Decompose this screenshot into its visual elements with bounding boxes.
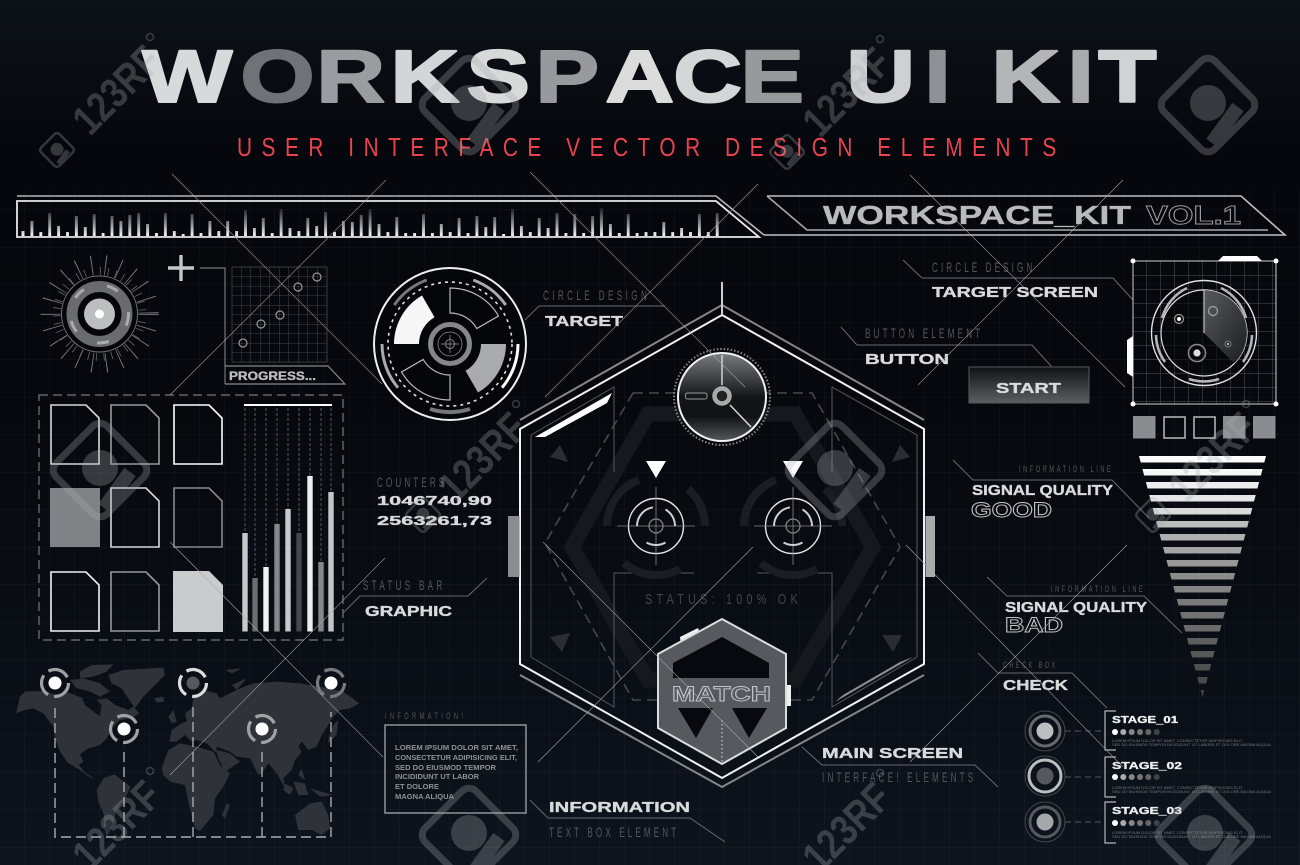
value: GOOD — [971, 499, 1052, 522]
squares row — [1133, 416, 1276, 438]
title: W — [142, 36, 233, 118]
caption: CIRCLE DESIGN — [543, 289, 647, 304]
title: T — [1098, 36, 1157, 118]
label: button — [841, 327, 1052, 368]
label: signal quality good — [953, 460, 1149, 522]
watermark registered marks — [146, 34, 1250, 776]
stage indicators — [1025, 711, 1104, 842]
stage 03: SED DO EIUSMOD TEMPOR INCIDIDUNT UT LABORE ET DOLORE MAGNA ALIQUA — [1112, 834, 1271, 839]
caption: INFORMATION LINE — [1019, 464, 1111, 474]
world map — [16, 664, 359, 837]
crosshair right — [744, 480, 842, 575]
subtitle: USER INTERFACE VECTOR DESIGN ELEMENTS — [237, 133, 1056, 162]
name: TARGET — [545, 313, 623, 330]
name: INFORMATION — [549, 799, 690, 816]
title: C — [673, 36, 742, 118]
map dashed leaders — [55, 707, 331, 837]
counters: COUNTERS — [377, 476, 444, 491]
bar chart — [242, 405, 334, 632]
title: A — [605, 36, 674, 118]
status text: STATUS: 100% OK — [645, 590, 798, 607]
title: R — [316, 36, 385, 118]
chart: signal funnel — [1139, 456, 1266, 696]
information lines — [395, 743, 518, 801]
caption: TEXT BOX ELEMENT — [549, 826, 676, 841]
panel: main hexagon screen — [508, 282, 935, 787]
watermark text: 123RF — [429, 404, 536, 510]
name: GRAPHIC — [365, 603, 452, 620]
value: BAD — [1005, 614, 1063, 637]
side tabs — [508, 516, 520, 577]
watermark text: 123RF — [1159, 404, 1266, 510]
information lines: LOREM IPSUM DOLOR SIT AMET, — [395, 743, 518, 752]
label: main screen — [802, 745, 998, 787]
dim hexagon band — [572, 414, 873, 680]
dashed hexagon — [545, 393, 900, 700]
panel: top equalizer bar — [17, 196, 764, 237]
title: O — [240, 36, 315, 118]
label: target — [525, 289, 665, 330]
name: TARGET SCREEN — [932, 284, 1098, 301]
panel: information text box — [385, 711, 526, 813]
panel: progress chart — [200, 267, 345, 384]
match badge: MATCH — [672, 683, 771, 706]
panel: information text box: INFORMATION! — [385, 711, 463, 721]
document tiles — [50, 405, 223, 632]
label: information — [530, 799, 725, 842]
button: start — [969, 367, 1089, 403]
caption: STATUS BAR — [363, 579, 442, 594]
name: MAIN SCREEN — [822, 745, 963, 762]
title: K — [390, 36, 459, 118]
information lines: ET DOLORE — [395, 782, 439, 791]
panel: document grid and bars — [39, 395, 343, 640]
stage 02: SED DO EIUSMOD TEMPOR INCIDIDUNT UT LABORE ET DOLORE MAGNA ALIQUA — [1112, 789, 1271, 794]
title: P — [535, 36, 599, 118]
icon: plus — [168, 255, 194, 281]
banner volume: VOL.1 — [1146, 200, 1241, 230]
name: SIGNAL QUALITY — [1005, 599, 1147, 616]
label: signal quality bad — [987, 577, 1182, 637]
stage 03 — [1112, 805, 1271, 839]
progress label: PROGRESS... — [229, 371, 316, 383]
information lines: SED DO EIUSMOD TEMPOR — [395, 763, 497, 772]
title: E — [740, 36, 831, 118]
title: K — [991, 36, 1060, 118]
caption: CIRCLE DESIGN — [932, 261, 1032, 276]
watermark small cameras — [39, 132, 1171, 865]
crosshair left — [607, 480, 705, 575]
stage 01: LOREM IPSUM DOLOR SIT AMET, CONSECTETUR ADIPISICING ELIT, — [1112, 738, 1243, 743]
panel: kit banner — [764, 196, 1285, 235]
banner name: WORKSPACE_KIT — [823, 200, 1131, 230]
name: CHECK — [1003, 677, 1068, 694]
information lines: INCIDIDUNT UT LABOR — [395, 772, 480, 781]
watermark text: 123RF — [63, 37, 170, 143]
title: I — [924, 36, 977, 118]
caption: INTERFACE! ELEMENTS — [822, 771, 973, 786]
dim triangles — [550, 445, 910, 652]
stage 01: SED DO EIUSMOD TEMPOR INCIDIDUNT UT LABORE ET DOLORE MAGNA ALIQUA — [1112, 742, 1271, 747]
information lines: MAGNA ALIQUA — [395, 792, 455, 801]
panel: stages — [1025, 711, 1271, 843]
counters — [377, 476, 492, 528]
title: S — [466, 36, 530, 118]
icon: sunburst dial — [50, 265, 148, 363]
stage brackets — [1105, 711, 1116, 843]
corner slashes — [535, 393, 612, 437]
counter values: 2563261,73 — [377, 513, 492, 528]
information lines: CONSECTETUR ADIPISICING ELIT, — [395, 753, 517, 762]
name: BUTTON — [865, 351, 949, 368]
label: graphic — [343, 578, 487, 620]
stage 02 — [1112, 760, 1271, 794]
title: U — [846, 36, 915, 118]
match badge — [658, 619, 791, 764]
label: target screen — [903, 260, 1133, 301]
hexagon frame — [520, 282, 924, 787]
title: I — [1067, 36, 1094, 118]
stage 02: STAGE_02 — [1112, 760, 1182, 772]
caption: CHECK BOX — [1003, 660, 1056, 670]
caption: BUTTON ELEMENT — [865, 327, 980, 342]
markers — [646, 461, 803, 478]
panel: radar target screen — [1127, 256, 1278, 406]
chart: target circle — [374, 268, 526, 420]
map pins — [42, 670, 344, 742]
stage 03: STAGE_03 — [1112, 805, 1182, 817]
counter values: 1046740,90 — [377, 493, 492, 508]
stage 01 — [1112, 714, 1271, 747]
stage 02: LOREM IPSUM DOLOR SIT AMET, CONSECTETUR ADIPISICING ELIT, — [1112, 785, 1243, 790]
top gauge — [674, 349, 770, 445]
decorative crossing lines — [170, 172, 1127, 775]
watermark text: 123RF — [793, 39, 900, 145]
stage 01: STAGE_01 — [1112, 714, 1178, 726]
stage 03: LOREM IPSUM DOLOR SIT AMET, CONSECTETUR ADIPISICING ELIT, — [1112, 830, 1243, 835]
button: start: START — [996, 380, 1061, 397]
counter values — [377, 493, 492, 528]
label: check — [978, 653, 1107, 708]
caption: INFORMATION LINE — [1051, 584, 1143, 594]
name: SIGNAL QUALITY — [972, 482, 1113, 499]
